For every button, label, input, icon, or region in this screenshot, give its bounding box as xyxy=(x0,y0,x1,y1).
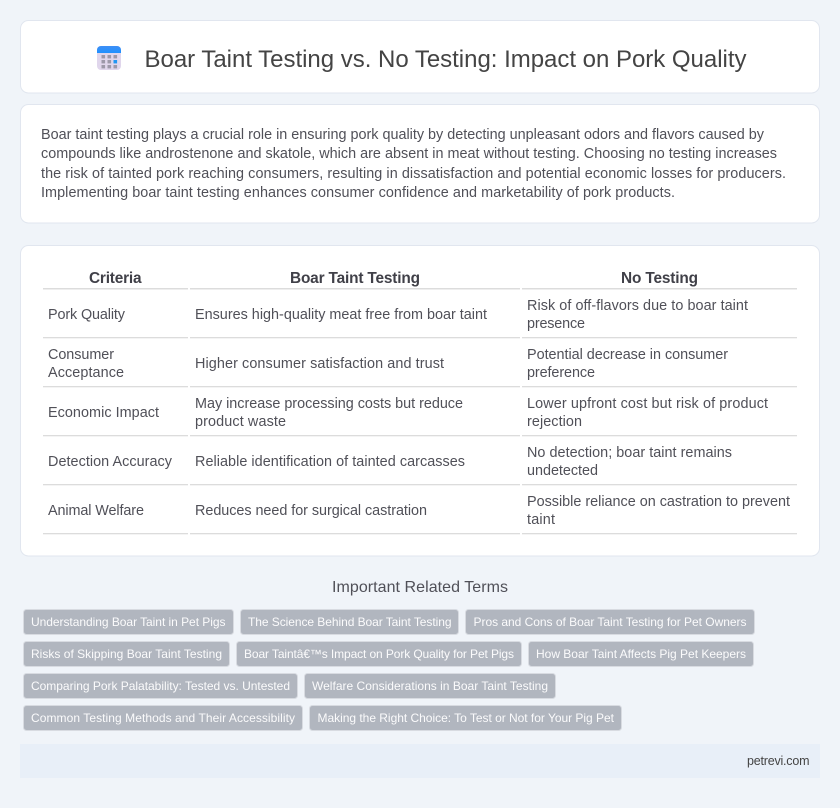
row: pork quality xyxy=(48,298,748,332)
row: economic impact: May increase processing costs but reduce xyxy=(195,396,463,412)
row: detection accuracy xyxy=(48,445,732,479)
intro paragraph: compounds like androstenone and skatole, which are absent in meat without testing. Choosing no testing increases xyxy=(41,146,777,162)
tag: Welfare Considerations in Boar Taint Testing xyxy=(312,679,548,693)
row: consumer acceptance: Higher consumer satisfaction and trust xyxy=(195,356,444,372)
row: pork quality: Pork Quality xyxy=(48,307,126,323)
row: consumer acceptance: Acceptance xyxy=(48,365,124,381)
row: economic impact xyxy=(48,396,768,430)
panel: introduction xyxy=(20,104,820,223)
tag: Understanding Boar Taint in Pet Pigs xyxy=(31,615,226,629)
intro paragraph xyxy=(41,127,786,201)
icon: calendar xyxy=(97,46,121,70)
tag xyxy=(466,610,754,634)
title: Boar Taint Testing vs. No Testing: Impact on Pork Quality xyxy=(144,46,746,73)
row: pork quality: Risk of off-flavors due to boar taint xyxy=(527,298,748,314)
table header: Criteria xyxy=(89,270,142,287)
row: detection accuracy: Detection Accuracy xyxy=(48,454,173,470)
tag xyxy=(24,610,234,634)
tag xyxy=(24,706,302,730)
table header: Boar Taint Testing xyxy=(290,270,420,287)
related term tags xyxy=(24,610,754,730)
row: detection accuracy: Reliable identification of tainted carcasses xyxy=(195,454,465,470)
row: detection accuracy: No detection; boar taint remains xyxy=(527,445,732,461)
tag xyxy=(304,674,556,698)
row: economic impact: Economic Impact xyxy=(48,405,159,421)
table header: No Testing xyxy=(621,270,698,287)
intro paragraph: the risk of tainted pork reaching consumers, resulting in dissatisfaction and potential economic losses for producers. xyxy=(41,166,786,182)
panel: comparison table xyxy=(20,246,820,556)
row: animal welfare: Possible reliance on castration to prevent xyxy=(527,494,790,510)
footer: petrevi.com xyxy=(747,754,810,768)
tag: Making the Right Choice: To Test or Not for Your Pig Pet xyxy=(318,711,615,725)
row: detection accuracy: undetected xyxy=(527,463,598,479)
tag xyxy=(310,706,622,730)
row: animal welfare: Reduces need for surgical castration xyxy=(195,503,427,519)
row: consumer acceptance xyxy=(48,347,728,381)
row: animal welfare: taint xyxy=(527,512,555,528)
row: economic impact: Lower upfront cost but risk of product xyxy=(527,396,768,412)
tag: Pros and Cons of Boar Taint Testing for Pet Owners xyxy=(474,615,746,629)
intro paragraph: Implementing boar taint testing enhances consumer confidence and marketability of pork products. xyxy=(41,185,675,201)
table rules xyxy=(43,288,797,534)
heading: related terms: Important Related Terms xyxy=(332,579,508,596)
tag: Comparing Pork Palatability: Tested vs. Untested xyxy=(31,679,290,693)
intro paragraph: Boar taint testing plays a crucial role in ensuring pork quality by detecting unpleasant odors and flavors caused by xyxy=(41,127,765,143)
tag: How Boar Taint Affects Pig Pet Keepers xyxy=(536,647,746,661)
tag xyxy=(236,642,522,666)
footer xyxy=(20,744,820,778)
tag: Common Testing Methods and Their Accessibility xyxy=(31,711,295,725)
row: pork quality: Ensures high-quality meat free from boar taint xyxy=(195,307,487,323)
tag xyxy=(24,674,298,698)
tag: Boar Taintâ€™s Impact on Pork Quality for Pet Pigs xyxy=(244,647,514,661)
tag xyxy=(24,642,230,666)
tag xyxy=(528,642,754,666)
tag: Risks of Skipping Boar Taint Testing xyxy=(31,647,222,661)
tag: The Science Behind Boar Taint Testing xyxy=(248,615,452,629)
row: animal welfare xyxy=(48,494,790,528)
tag xyxy=(240,610,458,634)
row: consumer acceptance: Consumer xyxy=(48,347,114,363)
row: animal welfare: Animal Welfare xyxy=(48,503,144,519)
row: economic impact: product waste xyxy=(195,414,286,430)
header panel xyxy=(20,20,820,93)
row: consumer acceptance: preference xyxy=(527,365,595,381)
row: pork quality: presence xyxy=(527,316,585,332)
row: economic impact: rejection xyxy=(527,414,582,430)
row: consumer acceptance: Potential decrease in consumer xyxy=(527,347,728,363)
table header xyxy=(89,270,698,287)
